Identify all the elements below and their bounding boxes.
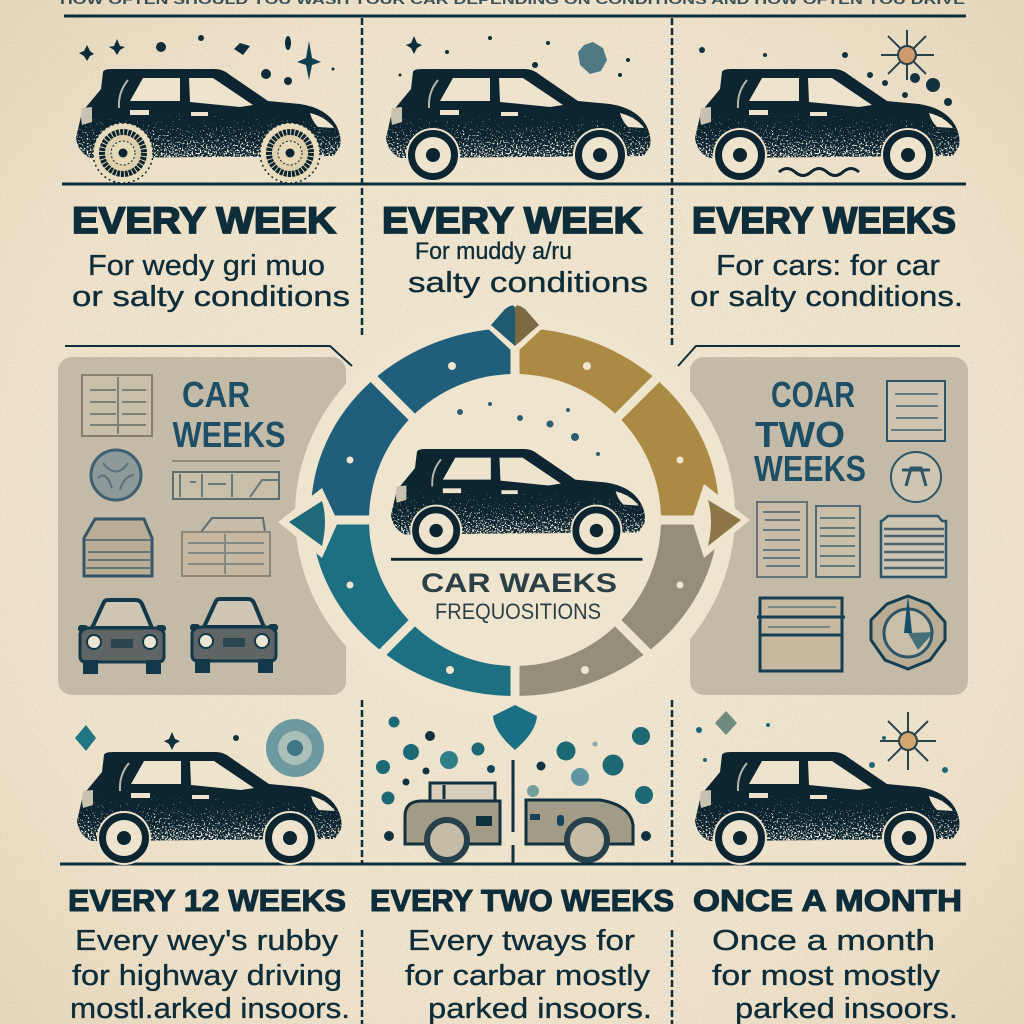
- panel: left grey icon panel: [58, 357, 346, 695]
- panel: top left card: [72, 35, 350, 313]
- panel heading: car weeks: CAR: [182, 374, 250, 415]
- icon: folder: [182, 518, 270, 576]
- arrow: top marker: [484, 298, 546, 354]
- icon: car rear: [84, 519, 152, 576]
- center title: FREQUOSITIONS: [435, 599, 601, 624]
- icon: sun and droplets: [696, 711, 948, 773]
- icon: muddy car: [76, 69, 342, 183]
- chart: central frequency ring: [278, 298, 750, 757]
- body text: For wedy gri muo: [88, 250, 325, 282]
- icon: list document: [887, 381, 945, 441]
- icon: sparkle and wheel badge: [75, 719, 324, 777]
- icon: sparkles: [79, 35, 334, 85]
- panel heading: car two weeks: COAR: [771, 374, 855, 415]
- icon: scattered droplets: [376, 716, 653, 841]
- panel: bottom right card: [693, 711, 962, 1024]
- icon: sparkles and badge: [398, 36, 630, 77]
- icon: car: [77, 752, 343, 865]
- body text: For muddy a/ru: [415, 238, 572, 265]
- heading: EVERY WEEKS: [692, 200, 956, 241]
- body text: for most mostly: [712, 960, 941, 992]
- icon: document: [82, 375, 152, 436]
- icon: car: [695, 752, 961, 865]
- panel heading: car two weeks: TWO: [755, 414, 845, 455]
- icon: box panel: [757, 598, 845, 671]
- body text: [72, 250, 350, 313]
- heading: EVERY TWO WEEKS: [370, 883, 674, 918]
- icon: car front 1: [78, 600, 166, 674]
- heading: EVERY 12 WEEKS: [68, 883, 346, 918]
- icon: car on wavy road: [695, 69, 961, 182]
- body text: [405, 925, 652, 1024]
- body text: Every tways for: [408, 925, 635, 957]
- ring segment dots: [346, 362, 684, 674]
- body text: [408, 238, 648, 299]
- panel heading: car two weeks: WEEKS: [754, 448, 866, 489]
- body text: for carbar mostly: [405, 960, 651, 992]
- body text: or salty conditions.: [690, 281, 963, 313]
- center title: [421, 568, 617, 624]
- panel: top right card: [690, 30, 963, 313]
- heading: ONCE A MONTH: [693, 883, 962, 918]
- icon: round badge: [91, 450, 141, 500]
- panel heading: car weeks: [172, 374, 286, 455]
- icon: dashboard strip: [172, 461, 280, 499]
- panel heading: car weeks: WEEKS: [172, 414, 286, 455]
- icon: open book: [757, 502, 860, 577]
- body text: for highway driving: [72, 960, 342, 992]
- body text: Every wey's rubby: [75, 925, 339, 957]
- icon: stacked tray: [881, 516, 946, 577]
- arrow: left marker: [278, 488, 338, 558]
- arrow: bottom marker: [487, 698, 543, 757]
- center title: CAR WAEKS: [421, 568, 617, 598]
- body text: or salty conditions: [72, 281, 350, 313]
- heading: EVERY WEEK: [382, 200, 642, 241]
- ring segment: blue upper left: [310, 320, 515, 520]
- panel: top middle card: [382, 36, 652, 299]
- panel: bottom left card: [68, 719, 350, 1024]
- body text: For cars: for car: [716, 250, 940, 282]
- body text: [712, 925, 958, 1024]
- ring segment: gold upper right: [520, 330, 718, 516]
- icon: car front 2: [190, 599, 278, 673]
- ring segment: grey lower right: [520, 524, 715, 696]
- panel heading: car two weeks: [754, 374, 866, 489]
- body text: salty conditions: [408, 267, 648, 299]
- body text: [690, 250, 963, 313]
- icon: split truck: [405, 760, 633, 864]
- icon: car clean wheels: [386, 69, 652, 182]
- body text: [70, 925, 350, 1024]
- panel: right grey icon panel: [690, 357, 968, 695]
- center dots: [457, 402, 600, 456]
- body text: Once a month: [712, 925, 935, 957]
- icon: center car: [391, 449, 646, 559]
- icon: round bug badge: [891, 452, 941, 502]
- heading: EVERY WEEK: [72, 200, 336, 241]
- ring segment: teal lower left: [310, 520, 515, 700]
- icon: sun and droplets: [699, 30, 952, 106]
- arrow: right marker: [692, 484, 750, 558]
- icon: round gauge: [871, 595, 945, 669]
- panel: bottom middle card: [370, 716, 674, 1024]
